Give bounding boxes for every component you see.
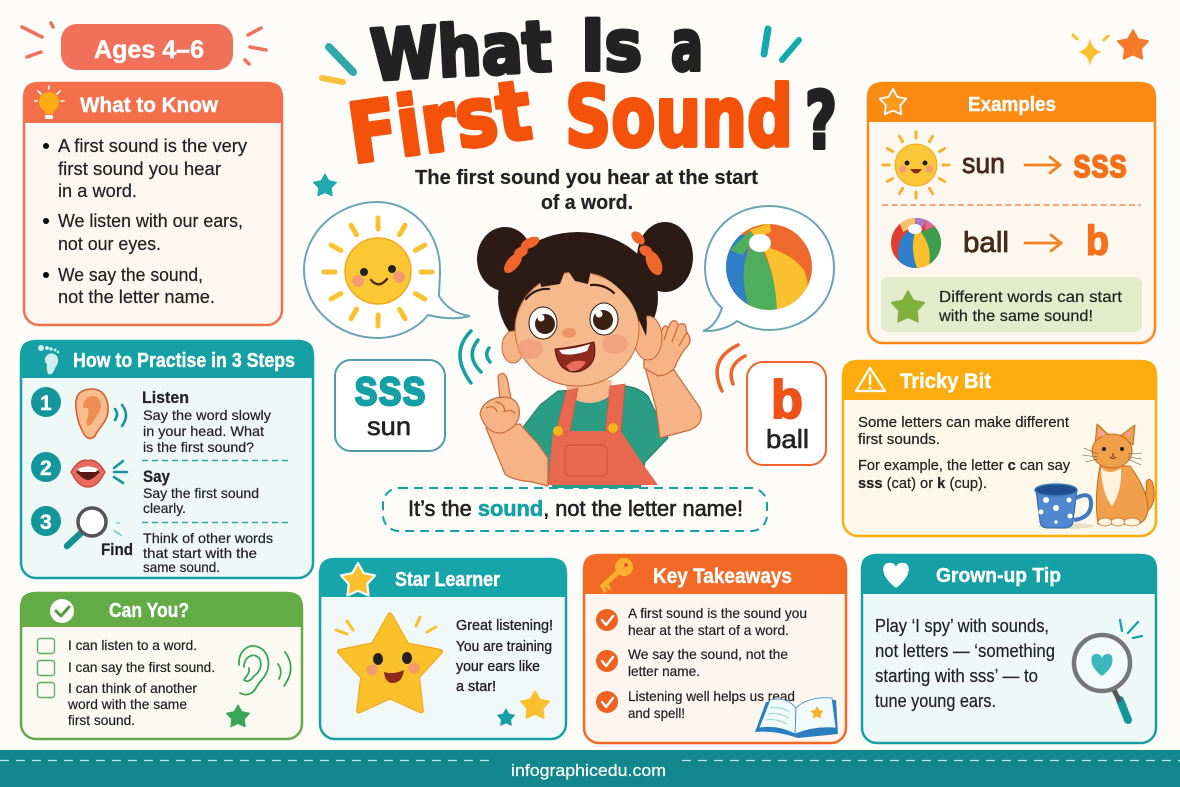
checklist: I can think of another <box>68 680 197 696</box>
note box <box>881 277 1142 332</box>
age badge: Ages 4–6 <box>94 36 204 64</box>
brows <box>526 285 614 299</box>
age badge <box>22 23 266 70</box>
step 2: Say <box>143 467 170 486</box>
callout: dashed reminder <box>383 488 767 531</box>
checklist: I can say the first sound. <box>68 659 215 675</box>
fringe <box>508 258 647 336</box>
icon: warning <box>856 368 885 391</box>
text block: For example, the letter c can say <box>858 458 1071 474</box>
bows <box>501 229 666 278</box>
example: ball to b: b <box>1086 217 1109 264</box>
step 1: 1 <box>40 392 52 415</box>
icon: star badge <box>341 563 375 596</box>
arms <box>486 424 548 486</box>
panel: star learner <box>319 558 567 739</box>
bullet list: in a word. <box>58 181 137 201</box>
note box: Different words can start <box>939 289 1123 306</box>
step 2 <box>31 452 259 516</box>
mouth <box>555 342 595 372</box>
tip text: tune young ears. <box>875 691 996 711</box>
icon: beach ball small <box>890 217 942 269</box>
face <box>515 272 639 386</box>
bullet list: first sound you hear <box>58 159 221 179</box>
smiling star <box>336 615 440 711</box>
step 1: Say the word slowly <box>143 407 271 423</box>
heading: What to Know <box>80 94 219 117</box>
panel: can you <box>20 592 303 739</box>
title: Is <box>581 5 642 87</box>
takeaway list <box>596 605 807 721</box>
card: b ball: ball <box>766 424 809 454</box>
neck <box>565 380 612 403</box>
icon: key <box>602 558 633 591</box>
takeaway list: hear at the start of a word. <box>628 622 789 638</box>
checklist: first sound. <box>68 712 135 728</box>
title: a <box>671 5 703 87</box>
overalls <box>548 384 658 485</box>
takeaway list: We say the sound, not the <box>628 646 788 662</box>
example: sun to sss: sun <box>962 148 1005 180</box>
icon: light bulb <box>35 86 64 119</box>
icon: star outline <box>880 89 906 114</box>
encouragement text: You are training <box>456 638 552 655</box>
checklist: I can listen to a word. <box>68 637 197 653</box>
heading: Tricky Bit <box>900 370 991 393</box>
panel: how to practise <box>20 340 314 578</box>
encouragement text <box>456 617 553 695</box>
bullet list: We say the sound, <box>58 265 203 285</box>
text block: Some letters can make different <box>858 415 1069 431</box>
heading: Grown-up Tip <box>936 565 1061 587</box>
text block <box>858 415 1071 492</box>
text block: first sounds. <box>858 432 940 448</box>
panel: what to know <box>23 82 283 325</box>
note box: with the same sound! <box>938 308 1093 325</box>
eyes <box>529 303 618 339</box>
panel: examples <box>867 82 1156 343</box>
icon: orange cat <box>1082 424 1154 526</box>
takeaway list: and spell! <box>628 705 685 721</box>
encouragement text: Great listening! <box>456 617 553 634</box>
icon: green star <box>227 705 249 727</box>
icon: blue mug <box>1035 484 1094 529</box>
icon: check badge <box>50 599 74 623</box>
example: ball to b: ball <box>963 227 1009 259</box>
shirt <box>520 386 668 490</box>
title: Sound <box>565 68 793 166</box>
footer <box>0 750 1180 787</box>
step 3: 3 <box>40 511 52 534</box>
title: What <box>369 6 554 97</box>
teal star <box>314 174 336 196</box>
panel: tricky bit <box>842 360 1157 536</box>
icon: green ear <box>239 646 291 695</box>
example: ball to b <box>963 217 1109 264</box>
text block: sss (cat) or k (cup). <box>858 476 987 492</box>
icon: footprint <box>38 345 59 374</box>
card: sss sun: sun <box>367 411 411 441</box>
step 1: in your head. What <box>143 423 264 439</box>
tip text: Play ‘I spy’ with sounds, <box>875 616 1049 636</box>
tip text <box>875 616 1055 711</box>
footer: infographicedu.com <box>511 761 666 780</box>
speech bubble: sun <box>304 202 470 338</box>
checklist <box>38 637 215 728</box>
bullet list: A first sound is the very <box>58 136 247 156</box>
example: sun to sss: sss <box>1073 140 1127 186</box>
title <box>343 5 837 183</box>
callout: dashed reminder: It’s the sound, not the letter name! <box>408 496 743 521</box>
step 3: Think of other words <box>143 530 273 546</box>
decorative stars top right <box>1073 30 1148 66</box>
example: sun to sss <box>962 140 1127 186</box>
subtitle <box>415 167 758 214</box>
icon: magnifier with heart <box>1074 620 1142 720</box>
icon: sun small <box>883 132 949 198</box>
step 3: that start with the <box>143 545 257 561</box>
panel: grown-up tip <box>861 554 1157 743</box>
step 1: is the first sound? <box>143 439 254 455</box>
subtitle: The first sound you hear at the start <box>415 167 758 189</box>
panel: key takeaways <box>583 554 847 743</box>
icon: beach ball <box>726 224 812 310</box>
nose and cheeks <box>517 328 628 359</box>
heading: Can You? <box>109 600 189 622</box>
encouragement text: a star! <box>456 678 496 695</box>
raised hand <box>644 321 690 376</box>
heading: Examples <box>968 94 1056 116</box>
step 3: same sound. <box>143 559 220 575</box>
sound waves <box>460 331 745 391</box>
card: b ball: b <box>771 370 803 430</box>
step 1 <box>31 387 271 455</box>
step 2: Say the first sound <box>143 485 259 501</box>
card: b ball <box>747 362 826 465</box>
title sparkles <box>322 29 799 82</box>
icon: heart <box>883 563 909 588</box>
bullet list: not our eyes. <box>58 234 161 254</box>
ears <box>502 316 662 363</box>
pointing hand <box>480 373 519 433</box>
step 3 <box>31 506 273 575</box>
bullet list <box>43 136 247 307</box>
encouragement text: your ears like <box>456 658 540 675</box>
step 2: clearly. <box>143 500 186 516</box>
bullet list: We listen with our ears, <box>58 211 243 231</box>
step 1: Listen <box>142 388 189 407</box>
speech bubble: ball <box>703 206 834 331</box>
icon: smiling sun <box>324 218 432 326</box>
hair <box>477 222 693 364</box>
checklist: word with the same <box>67 696 187 712</box>
subtitle: of a word. <box>541 192 633 214</box>
heading: How to Practise in 3 Steps <box>73 350 295 372</box>
takeaway list: Listening well helps us read <box>628 688 795 704</box>
small stars <box>497 691 549 725</box>
tip text: starting with sss’ — to <box>875 666 1038 686</box>
step 2: 2 <box>40 457 52 480</box>
takeaway list: letter name. <box>628 663 700 679</box>
card: sss sun: sss <box>354 359 426 417</box>
heading: Key Takeaways <box>653 565 792 588</box>
character: girl <box>477 222 701 490</box>
title: First <box>343 63 537 183</box>
card: sss sun <box>335 359 445 451</box>
tip text: not letters — ‘something <box>875 641 1055 661</box>
heading: Star Learner <box>395 569 500 591</box>
takeaway list: A first sound is the sound you <box>628 605 807 621</box>
title: ? <box>805 77 837 167</box>
bullet list: not the letter name. <box>58 287 215 307</box>
step 3: Find <box>101 540 133 559</box>
icon: open book <box>755 698 838 738</box>
